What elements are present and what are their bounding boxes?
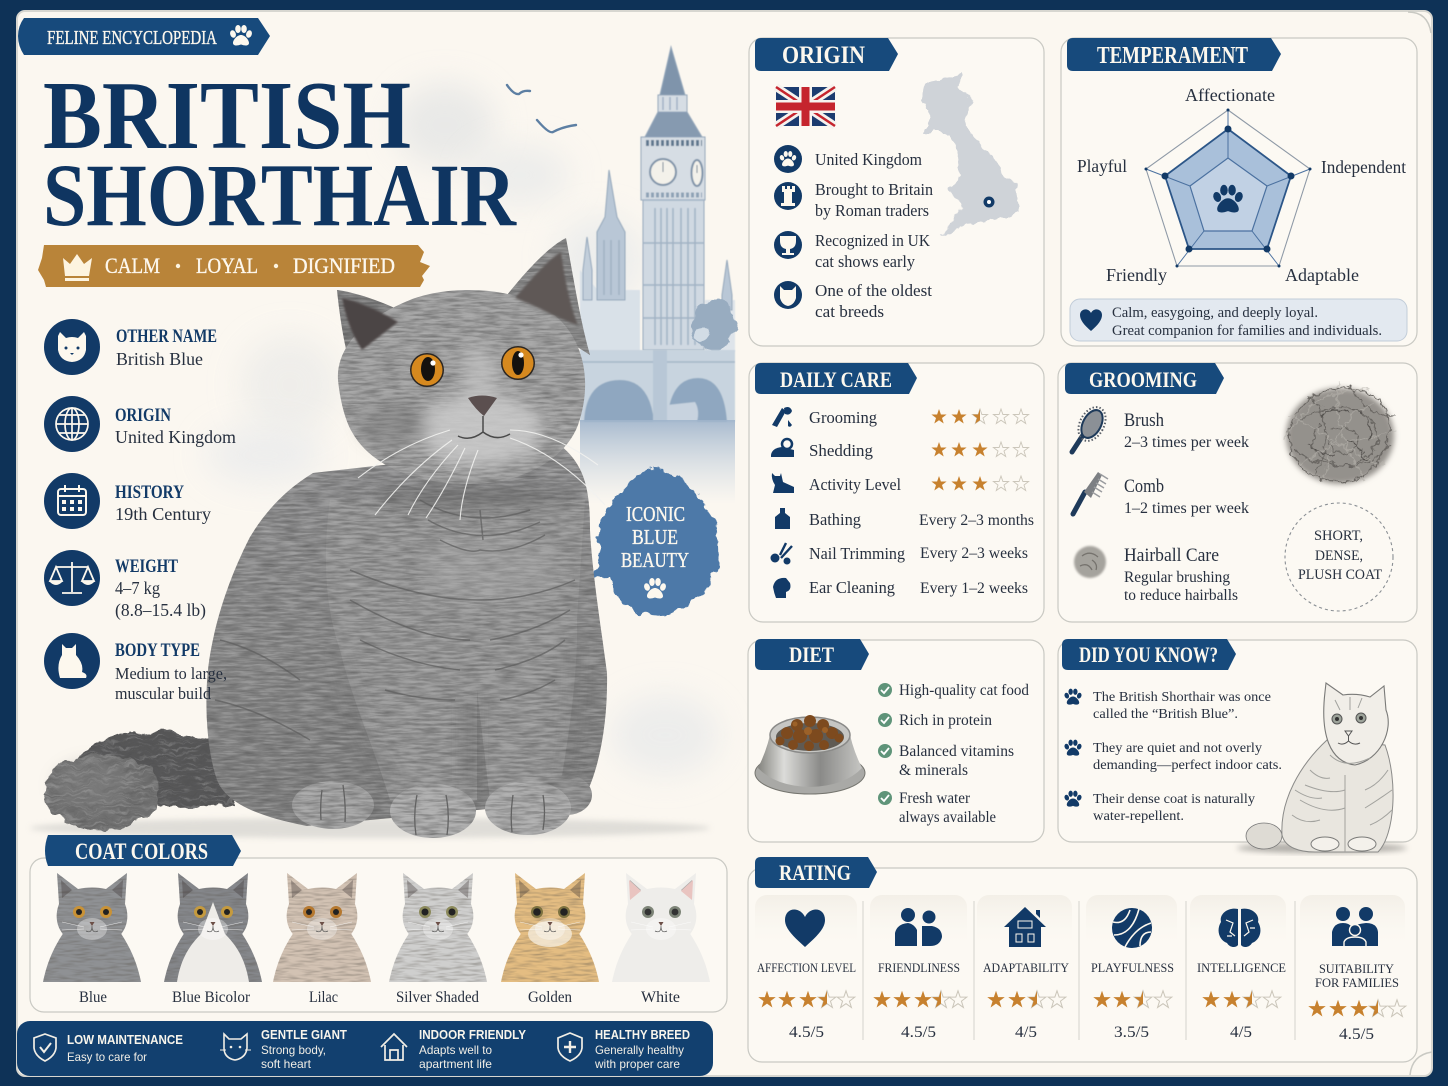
row: bathing: Every 2–3 months (919, 512, 1034, 529)
rating: suitability for families: SUITABILITY (1319, 961, 1395, 976)
cat nose and mouth (458, 396, 510, 438)
row: nail trimming: Every 2–3 weeks (920, 545, 1028, 562)
rating: playfulness: PLAYFULNESS (1091, 960, 1174, 975)
panel: did you know (1058, 639, 1417, 853)
swatch: lilac: Lilac (309, 989, 338, 1006)
fact: body type: muscular build (115, 684, 211, 703)
highlight: gentle giant: GENTLE GIANT (261, 1028, 347, 1042)
item: roman traders: by Roman traders (815, 201, 929, 220)
gold ribbon: calm, loyal, dignified: CALM (105, 253, 160, 278)
checklist: Rich in protein (899, 712, 992, 729)
row: shedding (771, 439, 1029, 460)
panel: temperament (1061, 38, 1417, 346)
row: grooming: Grooming (809, 408, 877, 427)
swatch: blue (43, 873, 141, 1006)
highlight: indoor friendly (381, 1028, 527, 1071)
swatch: white: White (641, 989, 680, 1006)
highlight: gentle giant: soft heart (261, 1057, 312, 1071)
fact: other name (44, 319, 217, 375)
fact: water repellent: water-repellent. (1093, 809, 1184, 824)
fact: body type (44, 633, 227, 703)
checklist: High-quality cat food (899, 682, 1029, 699)
radar chart: Affectionate (1185, 85, 1275, 105)
illustration: main cat (30, 238, 710, 838)
highlight: low maintenance: LOW MAINTENANCE (67, 1033, 183, 1047)
title: BRITISH (43, 62, 411, 170)
icon: comb (1073, 472, 1108, 514)
highlight: indoor friendly: Adapts well to (419, 1043, 492, 1057)
panel: grooming (1058, 363, 1417, 622)
swatch: blue: Blue (79, 989, 107, 1006)
fact: british blue: The British Shorthair was once (1093, 690, 1271, 705)
fact: weight: WEIGHT (115, 556, 178, 577)
gold ribbon: calm, loyal, dignified: LOYAL (196, 253, 258, 278)
cat chest fur folds (215, 500, 575, 740)
item: hairball care (1124, 545, 1238, 604)
swatch: lilac (273, 873, 371, 1006)
fact: other name: OTHER NAME (116, 326, 217, 347)
fact: british blue (1064, 689, 1271, 722)
highlight: healthy breed: HEALTHY BREED (595, 1028, 690, 1042)
swatch: silver shaded (389, 873, 487, 1006)
panel: diet (748, 639, 1044, 842)
checklist: Balanced vitamins (899, 743, 1014, 760)
fact: history (44, 473, 211, 529)
row: nail trimming (770, 543, 1028, 564)
rating: friendliness (873, 908, 967, 1041)
title (43, 62, 518, 245)
callout: calm summary (1070, 299, 1407, 341)
bottom highlights strip (17, 1021, 713, 1076)
heading: diet: DIET (789, 642, 834, 667)
gold ribbon: calm, loyal, dignified (38, 245, 430, 287)
item: comb: 1–2 times per week (1124, 500, 1249, 517)
rating: intelligence: 4/5 (1230, 1024, 1252, 1041)
row: shedding: Shedding (809, 441, 873, 460)
item: cat shows: Recognized in UK (815, 231, 931, 250)
radar chart: Adaptable (1285, 265, 1359, 285)
heading: temperament: TEMPERAMENT (1097, 43, 1248, 69)
heading: grooming (1065, 363, 1224, 394)
badge: Feline Encyclopedia (18, 18, 270, 55)
rating: intelligence: INTELLIGENCE (1197, 960, 1286, 975)
callout: coat type (1285, 503, 1393, 611)
panel: coat colors (30, 835, 727, 1012)
highlight: indoor friendly: apartment life (419, 1057, 492, 1071)
fact: other name: British Blue (116, 349, 203, 369)
icon: brush (1072, 402, 1111, 452)
swatch: blue bicolor: Blue Bicolor (172, 989, 251, 1006)
item: brush (1124, 410, 1249, 451)
rating card backgrounds (755, 895, 1405, 985)
item: hairball care: to reduce hairballs (1124, 587, 1238, 604)
item: brush: 2–3 times per week (1124, 434, 1249, 451)
rating: adaptability: ADAPTABILITY (983, 960, 1070, 975)
item: hairball care: Hairball Care (1124, 545, 1219, 566)
fact: history: 19th Century (115, 504, 211, 524)
item: cat shows: cat shows early (815, 252, 915, 271)
title: SHORTHAIR (43, 147, 518, 245)
fact: weight: 4–7 kg (115, 578, 160, 598)
swatch: white (612, 873, 710, 1006)
rating: friendliness: 4.5/5 (901, 1024, 936, 1041)
radar chart: Friendly (1106, 265, 1167, 285)
illustration: fur ball (1285, 380, 1395, 484)
badge: Feline Encyclopedia: FELINE ENCYCLOPEDIA (47, 27, 217, 49)
heading: origin (755, 38, 898, 71)
blob badge: iconic blue beauty: ICONIC (626, 502, 685, 526)
highlight: gentle giant (220, 1028, 347, 1071)
item: roman traders (774, 180, 933, 220)
fact: origin: ORIGIN (115, 405, 171, 426)
row: bathing (775, 508, 1034, 529)
icon: small hairball (1074, 546, 1106, 578)
checklist: always available (899, 809, 996, 826)
radar chart: Playful (1077, 156, 1127, 176)
heading: rating (755, 857, 877, 888)
radar chart: Independent (1321, 157, 1406, 177)
cat whiskers (358, 430, 605, 520)
checklist: & minerals (899, 762, 968, 779)
rating: adaptability (983, 907, 1070, 1041)
highlight: gentle giant: Strong body, (261, 1043, 326, 1057)
row: activity level: Activity Level (809, 475, 901, 494)
checklist (878, 682, 1029, 826)
background clouds (205, 83, 720, 775)
fact list (44, 319, 236, 703)
fact: quiet: They are quiet and not overly (1093, 741, 1262, 756)
rating: affection level: 4.5/5 (789, 1024, 824, 1041)
highlight: low maintenance (34, 1033, 183, 1064)
fact: body type: Medium to large, (115, 664, 227, 683)
birds (507, 85, 576, 132)
row: bathing: Bathing (809, 510, 861, 529)
panel: daily care (749, 363, 1044, 622)
item: hairball care: Regular brushing (1124, 569, 1230, 586)
radar chart (1077, 85, 1406, 285)
fact: history: HISTORY (115, 482, 184, 503)
item: brush: Brush (1124, 410, 1164, 431)
heading: origin: ORIGIN (782, 42, 865, 69)
fact: quiet (1064, 740, 1282, 773)
rating: suitability for families: FOR FAMILIES (1315, 975, 1399, 990)
item: comb: Comb (1124, 476, 1164, 497)
row: grooming (772, 407, 1029, 427)
rating: playfulness (1091, 908, 1174, 1041)
heading: diet (755, 639, 869, 670)
fact: quiet: demanding—perfect indoor cats. (1093, 758, 1282, 773)
item: oldest breeds (774, 281, 932, 321)
item: oldest breeds: cat breeds (815, 302, 884, 321)
illustration: London skyline (580, 47, 735, 504)
row: ear cleaning: Ear Cleaning (809, 578, 895, 597)
illustration: food bowl (755, 715, 865, 794)
fact: body type: BODY TYPE (115, 640, 200, 661)
highlight: healthy breed: with proper care (594, 1057, 680, 1071)
swatch: golden (501, 873, 599, 1006)
rating: suitability for families (1308, 907, 1406, 1043)
heading: did you know: DID YOU KNOW? (1079, 642, 1218, 667)
row: activity level (772, 473, 1029, 494)
fact: water repellent (1064, 791, 1255, 824)
panel: rating (748, 857, 1417, 1062)
cat shading (340, 345, 575, 785)
row: nail trimming: Nail Trimming (809, 544, 905, 563)
rating: friendliness: FRIENDLINESS (878, 960, 960, 975)
rating: adaptability: 4/5 (1015, 1024, 1037, 1041)
rating: intelligence (1197, 909, 1286, 1041)
checklist: Fresh water (899, 790, 971, 807)
highlight: healthy breed: Generally healthy (595, 1043, 684, 1057)
callout: calm summary: Calm, easygoing, and deeply loyal. (1112, 305, 1318, 321)
item: roman traders: Brought to Britain (815, 180, 933, 199)
fact: weight: (8.8–15.4 lb) (115, 600, 206, 621)
fact: british blue: called the “British Blue”. (1093, 707, 1238, 722)
swatch: blue bicolor (164, 873, 262, 1006)
swatch: silver shaded: Silver Shaded (396, 989, 479, 1006)
heading: daily care (755, 363, 917, 394)
item: oldest breeds: One of the oldest (815, 281, 932, 300)
blob badge: iconic blue beauty: BLUE (632, 525, 678, 549)
rating: suitability for families: 4.5/5 (1339, 1026, 1374, 1043)
rating: affection level (757, 909, 856, 1041)
fact: weight (44, 550, 206, 621)
callout: coat type: DENSE, (1315, 548, 1363, 564)
callout: coat type: SHORT, (1314, 528, 1363, 544)
row: ear cleaning: Every 1–2 weeks (920, 580, 1028, 597)
fact: origin: United Kingdom (115, 427, 236, 447)
row: ear cleaning (773, 578, 1028, 598)
item: comb (1124, 476, 1249, 517)
heading: grooming: GROOMING (1089, 367, 1197, 392)
highlight: indoor friendly: INDOOR FRIENDLY (419, 1028, 527, 1042)
heading: temperament (1067, 38, 1281, 71)
skyline water (580, 420, 735, 504)
item: cat shows (774, 231, 931, 271)
cat paws toes (321, 785, 544, 835)
highlight: low maintenance: Easy to care for (67, 1050, 147, 1064)
fact: origin (44, 396, 236, 452)
blob badge: iconic blue beauty: BEAUTY (621, 548, 689, 572)
skyline bridge (580, 350, 735, 422)
heading: coat colors: COAT COLORS (75, 839, 208, 864)
item: united kingdom: United Kingdom (815, 150, 922, 169)
map: united kingdom (919, 73, 1020, 235)
fact: water repellent: Their dense coat is naturally (1093, 792, 1255, 807)
gold ribbon: calm, loyal, dignified: DIGNIFIED (293, 253, 395, 278)
highlight: healthy breed (558, 1028, 690, 1071)
icon: union jack flag (776, 87, 835, 126)
rating: affection level: AFFECTION LEVEL (757, 960, 856, 975)
callout: coat type: PLUSH COAT (1298, 567, 1382, 583)
item: united kingdom (774, 145, 922, 173)
panel: origin (749, 38, 1044, 346)
blob badge: iconic blue beauty (589, 470, 718, 615)
rating: playfulness: 3.5/5 (1114, 1024, 1149, 1041)
illustration: sketched cat (1237, 683, 1407, 853)
heading: coat colors (45, 835, 241, 866)
cat tail (44, 731, 238, 830)
swatch: golden: Golden (528, 989, 572, 1006)
heading: rating: RATING (779, 860, 851, 885)
heading: daily care: DAILY CARE (780, 367, 892, 392)
callout: calm summary: Great companion for families and individuals. (1112, 323, 1382, 339)
heading: did you know (1062, 639, 1236, 670)
cat eyes (410, 346, 535, 387)
skyline tree (691, 300, 735, 350)
